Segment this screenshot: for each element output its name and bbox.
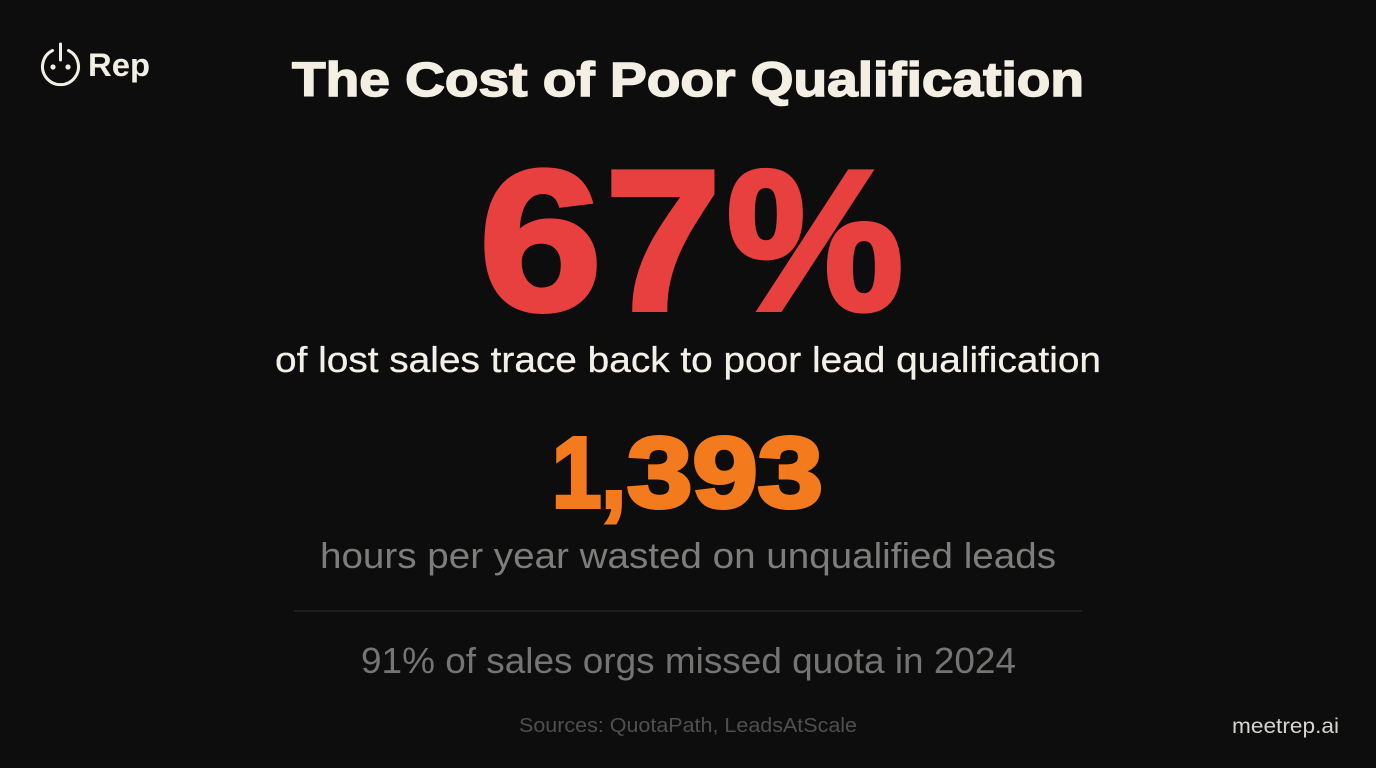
big stat: 67% (479, 130, 904, 352)
stat caption: lost sales: of lost sales trace back to poor lead qualification (275, 339, 1101, 380)
sources: Sources: QuotaPath, LeadsAtScale (519, 715, 857, 737)
title: The Cost of Poor Qualification (292, 54, 1084, 107)
website: meetrep.ai (1232, 715, 1339, 738)
logo: Rep (42, 44, 150, 85)
secondary stat: 1,393 (552, 417, 823, 529)
secondary stat: 1,393: 393 (627, 417, 823, 529)
big stat: 67%: 6 (479, 130, 602, 352)
supporting stat: missed quota: 91% of sales orgs missed quota in 2024 (361, 640, 1016, 681)
icon: power button face (42, 44, 78, 85)
big stat: 67%: 7 (605, 130, 721, 352)
big stat: 67%: % (726, 130, 904, 352)
secondary stat: 1,393: 1, (552, 417, 626, 529)
logo wordmark: Rep (88, 47, 150, 83)
stat caption: hours wasted: hours per year wasted on unqualified leads (320, 535, 1056, 576)
